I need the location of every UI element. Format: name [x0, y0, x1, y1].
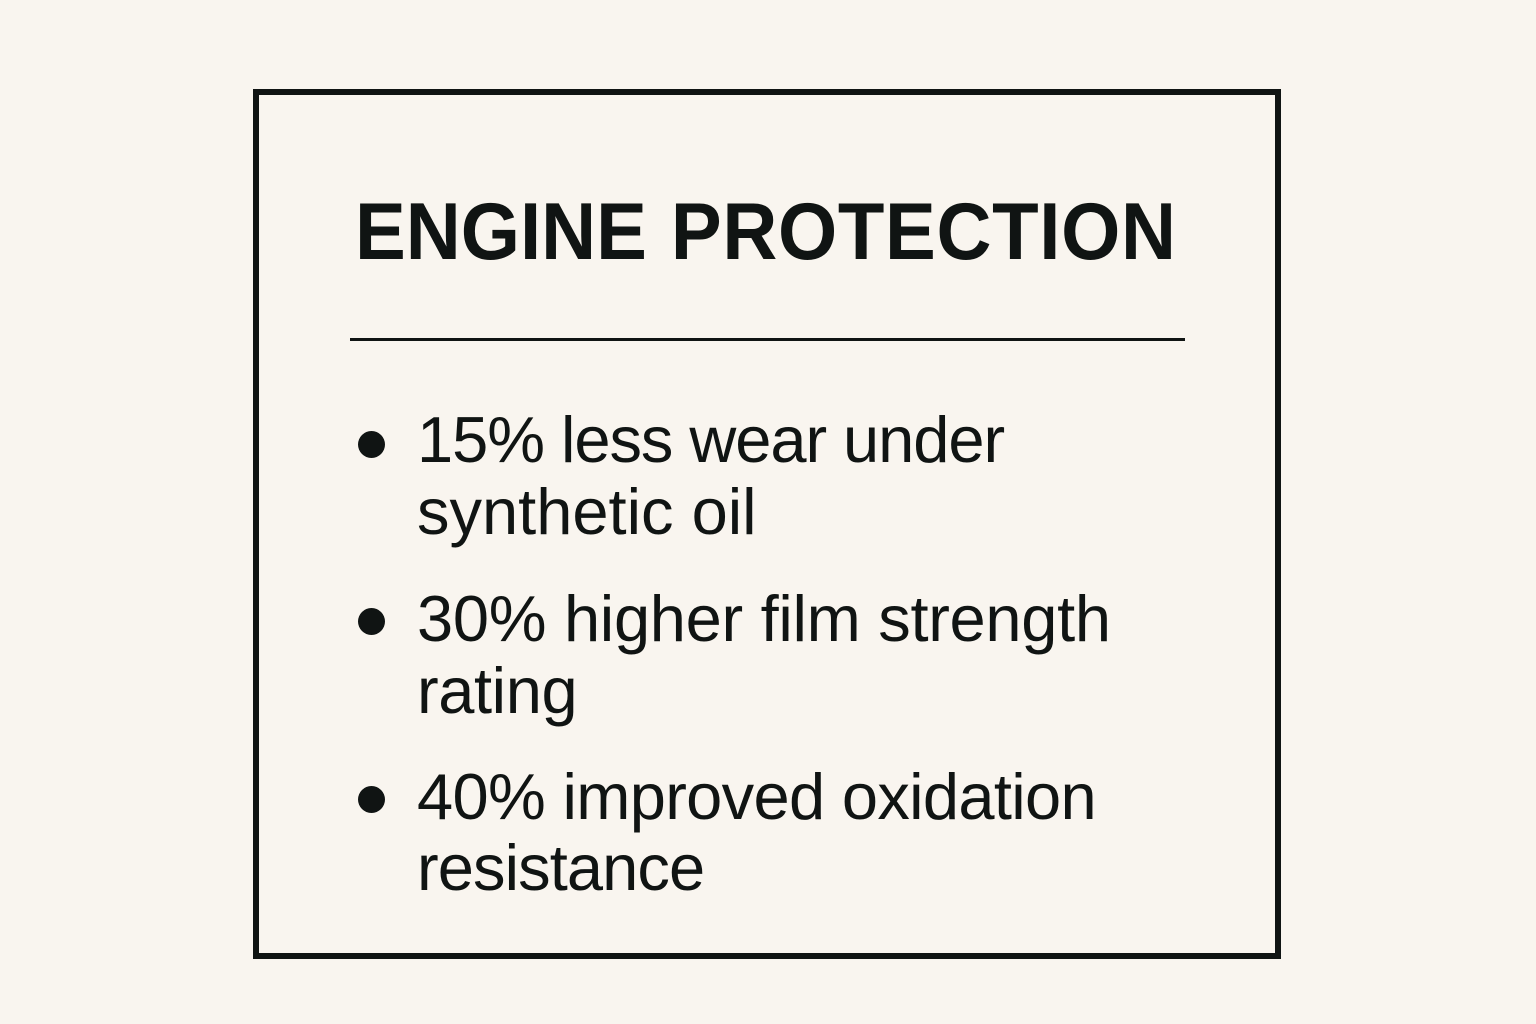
heading: engine protection: ENGINE PROTECTION — [355, 187, 1177, 277]
bullet item 1 — [358, 403, 1004, 548]
bullet item 3 — [358, 760, 1096, 904]
bullet item 2 — [358, 582, 1111, 727]
icon: bullet dot 2 — [358, 608, 385, 635]
icon: bullet dot 1 — [358, 431, 385, 458]
text: 40% improved oxidation resistance: resistance — [417, 831, 704, 904]
panel: engine protection card — [253, 89, 1281, 959]
text: 40% improved oxidation resistance — [417, 760, 1096, 904]
text: 30% higher film strength rating: 30% higher film strength — [417, 582, 1111, 655]
text: 15% less wear under synthetic oil — [417, 403, 1004, 548]
text: 40% improved oxidation resistance: 40% improved oxidation — [417, 760, 1096, 833]
text: 15% less wear under synthetic oil: 15% less wear under — [417, 403, 1004, 476]
text: 15% less wear under synthetic oil: synthetic oil — [417, 475, 757, 548]
text: 30% higher film strength rating — [417, 582, 1111, 727]
icon: bullet dot 3 — [358, 786, 385, 813]
text: 30% higher film strength rating: rating — [417, 654, 577, 727]
